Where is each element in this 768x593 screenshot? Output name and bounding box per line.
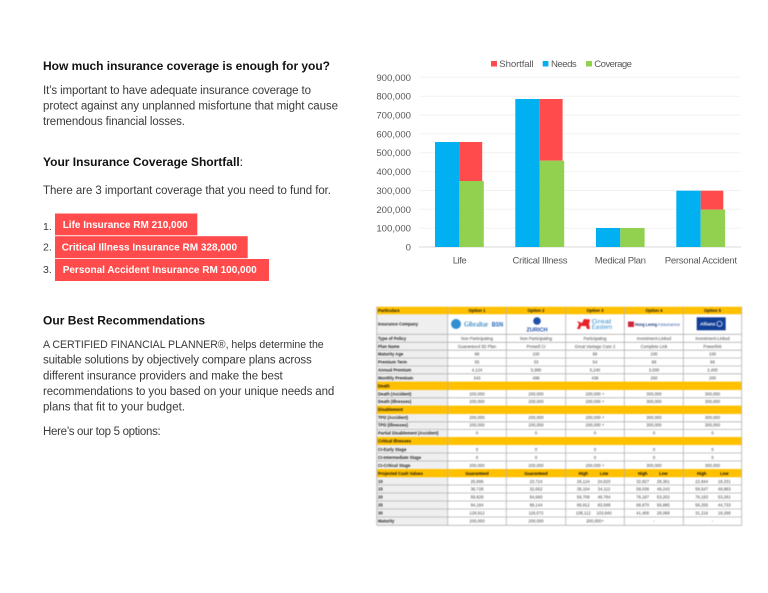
disablement section	[378, 407, 721, 436]
policy details rows: Investment-Linked	[695, 336, 730, 341]
y axis labels: 100,000	[376, 224, 411, 235]
disablement section: 200,000 +	[586, 415, 605, 420]
disablement section: Disablement	[378, 407, 404, 412]
bars: life	[435, 142, 484, 247]
heading: recommendations: Our Best Recommendations	[43, 314, 205, 328]
disablement section: 200,000	[528, 422, 544, 428]
x axis labels: Personal Accident	[665, 256, 737, 266]
disablement section: 200,000 +	[586, 422, 605, 428]
disablement section: 300,000	[646, 415, 662, 420]
projected cash values section: 59,036	[636, 486, 650, 492]
death section: 200,000	[469, 392, 485, 396]
logo: Gibraltar BSN: BSN	[492, 322, 503, 328]
y axis labels: 700,000	[376, 110, 411, 122]
y axis labels: 500,000	[376, 148, 411, 159]
policy details rows: 5,980	[531, 368, 542, 372]
projected cash values section: 94,184	[471, 502, 484, 508]
projected cash values section: Maturity	[378, 518, 395, 524]
projected cash values section: 68,670	[636, 502, 650, 508]
policy details rows: 5,240	[590, 368, 601, 372]
projected cash values section: 22,844	[695, 479, 709, 484]
table header row: Particulars	[378, 308, 400, 313]
list: shortfall items	[43, 214, 269, 281]
text block: top 5 options: Here’s our top 5 options:	[43, 426, 161, 438]
policy details rows: Complete Link	[641, 344, 668, 349]
critical illnesses section: CI-Critical Stage	[378, 463, 411, 468]
projected cash values section: 54,660	[530, 494, 543, 500]
logo: Gibraltar BSN	[451, 319, 503, 329]
logo: Great Eastern: Great	[592, 318, 611, 326]
projected cash values section: 86,812	[577, 502, 590, 508]
disablement section: 200,000	[469, 422, 485, 428]
item: life insurance: Life Insurance RM 210,000	[63, 220, 188, 231]
logo: Hong Leong Assurance: Assurance	[658, 322, 680, 327]
y axis labels: 900,000	[376, 73, 411, 84]
logo: Zurich	[526, 317, 548, 334]
projected cash values section: 28,068	[657, 510, 670, 516]
insurance company row with logos: Insurance Company	[378, 322, 419, 327]
critical illnesses section: 200,000	[469, 463, 485, 468]
projected cash values section: 200,000+	[586, 518, 604, 524]
logo: Great Eastern	[577, 318, 613, 331]
critical illnesses section: 0	[594, 455, 597, 460]
table header row: Option 3	[587, 308, 604, 313]
death section: Death	[378, 384, 390, 388]
policy details rows: Monthly Premium	[378, 376, 413, 380]
text block: recommendations paragraph: different insurance providers and make the best	[43, 370, 283, 382]
projected cash values section: 83,588	[598, 502, 611, 508]
logo: Allianz	[697, 317, 726, 330]
projected cash values section: 200,000	[469, 518, 485, 524]
policy details rows: 100	[532, 352, 540, 356]
policy details rows: Prowell CI	[526, 344, 546, 349]
y axis labels: 400,000	[376, 167, 411, 178]
logo: Great Eastern: Eastern	[592, 324, 613, 331]
y axis labels: 800,000	[376, 92, 411, 103]
policy details rows: 55	[475, 360, 480, 364]
bars: medical plan	[596, 228, 645, 247]
policy details rows: 86	[593, 352, 598, 356]
text block: three coverages: There are 3 important coverage that you need to fund for.	[43, 185, 331, 197]
heading: how much coverage: How much insurance coverage is enough for you?	[43, 59, 330, 73]
projected cash values section: Projected Cash Values	[378, 471, 424, 476]
bars: personal accident	[676, 191, 725, 247]
disablement section: 300,000	[705, 422, 721, 428]
projected cash values section: 56,885	[657, 502, 670, 508]
bars: critical illness	[515, 99, 564, 247]
critical illnesses section: 0	[711, 447, 714, 452]
chart legend	[491, 59, 632, 70]
disablement section: 0	[535, 430, 538, 436]
critical illnesses section: 0	[476, 447, 479, 452]
critical illnesses section: 0	[535, 455, 538, 460]
death section: 200,000 +	[586, 392, 605, 396]
projected cash values section: 10	[378, 479, 383, 484]
projected cash values section: 49,883	[718, 486, 731, 492]
x axis labels: Life	[453, 256, 467, 266]
logo: Gibraltar BSN: Gibraltar	[464, 320, 488, 328]
policy details rows: 100	[709, 352, 717, 356]
comparison table: top 5 options	[377, 307, 742, 525]
projected cash values section: 76,187	[636, 494, 650, 500]
policy details rows: Plan Name	[378, 344, 400, 349]
projected cash values section: 23,724	[530, 479, 543, 484]
disablement section: 0	[653, 430, 656, 436]
text block: recommendations paragraph: plans that fit to your budget.	[43, 402, 185, 414]
projected cash values section	[378, 471, 731, 524]
policy details rows: 4,124	[472, 368, 483, 372]
projected cash values section: 108,112	[576, 510, 591, 516]
critical illnesses section: CI-Intermediate Stage	[378, 455, 422, 460]
projected cash values section: Low	[600, 471, 609, 476]
chart legend: Needs	[551, 59, 577, 70]
projected cash values section: 32,652	[530, 486, 543, 492]
policy details rows: Great Vantage Care 2	[575, 344, 616, 349]
y axis labels: 300,000	[376, 186, 411, 197]
policy details rows: Annual Premium	[378, 368, 412, 372]
item: personal accident insurance	[43, 259, 269, 281]
death section: Death (Illnesses)	[378, 399, 412, 404]
text block: recommendations paragraph: suitable solutions by objectively compare plans across	[43, 354, 312, 366]
policy details rows: 200	[709, 376, 717, 380]
policy details rows: Premium Term	[378, 360, 407, 364]
disablement section: 0	[711, 430, 714, 436]
disablement section: 200,000	[469, 415, 485, 420]
disablement section: 300,000	[705, 415, 721, 420]
projected cash values section: 118,072	[529, 510, 544, 516]
x axis labels	[453, 256, 737, 266]
policy details rows: Guaranteed 3D Plan	[458, 344, 497, 349]
policy details rows: 250	[650, 376, 658, 380]
death section: 200,000	[469, 399, 485, 404]
projected cash values section: 49,243	[657, 486, 670, 492]
policy details rows: Non Participating	[461, 336, 494, 341]
death section: 300,000	[705, 392, 721, 396]
critical illnesses section: 0	[653, 447, 656, 452]
projected cash values section: 31,216	[695, 510, 709, 516]
policy details rows: 54	[593, 360, 598, 364]
death section: 300,000	[646, 399, 662, 404]
item: life insurance: 1.	[43, 221, 52, 233]
projected cash values section: 30	[378, 510, 383, 516]
x axis labels: Medical Plan	[595, 256, 646, 266]
item: life insurance	[43, 214, 197, 235]
critical illnesses section	[378, 438, 721, 468]
policy details rows: 100	[650, 352, 658, 356]
text block: recommendations paragraph	[43, 339, 334, 414]
projected cash values section: 26,124	[577, 479, 590, 484]
policy details rows: 88	[475, 352, 480, 356]
policy details rows: 498	[532, 376, 540, 380]
text block: intro paragraph: tremendous financial losses.	[43, 116, 185, 128]
death section	[378, 384, 721, 404]
policy details rows: Maturity Age	[378, 352, 404, 356]
projected cash values section: 103,640	[596, 510, 612, 516]
death section: Death (Accident)	[378, 392, 412, 396]
death section: 300,000	[705, 399, 721, 404]
policy details rows: 68	[710, 360, 715, 364]
projected cash values section: -	[712, 518, 714, 524]
critical illnesses section: CI-Early Stage	[378, 447, 407, 452]
projected cash values section: 59,828	[471, 494, 484, 500]
table header row: Option 1	[469, 308, 486, 313]
policy details rows: 2,400	[707, 368, 718, 372]
projected cash values section: 49,784	[598, 494, 611, 500]
y axis labels: 0	[406, 242, 411, 254]
projected cash values section: -	[653, 518, 655, 524]
text block: intro paragraph: protect against any unplanned misfortune that might cause	[43, 100, 338, 112]
policy details rows	[378, 336, 730, 380]
disablement section: TPD (Accident)	[378, 415, 409, 420]
projected cash values section: 44,733	[718, 502, 731, 508]
projected cash values section: 18,331	[718, 479, 731, 484]
policy details rows: Non Participating	[520, 336, 553, 341]
projected cash values section: Guaranteed	[524, 471, 548, 476]
projected cash values section: High	[579, 471, 588, 476]
text block: intro paragraph: It’s important to have adequate insurance coverage to	[43, 85, 311, 97]
disablement section: TPD (Illnesses)	[378, 422, 409, 428]
projected cash values section: 56,255	[695, 502, 709, 508]
logo: Allianz: Allianz	[700, 322, 716, 328]
projected cash values section: 41,406	[636, 510, 650, 516]
policy details rows: 436	[592, 376, 599, 380]
logo: Zurich: ZURICH	[526, 328, 548, 334]
heading: coverage shortfall: Your Insurance Coverage Shortfall:	[43, 155, 243, 169]
critical illnesses section: 0	[653, 455, 656, 460]
item: critical illness insurance: 2.	[43, 242, 52, 254]
table header row	[378, 308, 722, 313]
table header row: Option 5	[704, 308, 722, 313]
critical illnesses section: 0	[594, 447, 597, 452]
projected cash values section: 36,104	[577, 486, 590, 492]
table header row: Option 2	[528, 308, 545, 313]
table header row: Option 4	[646, 308, 663, 313]
projected cash values section: 53,261	[718, 494, 731, 500]
policy details rows: 68	[652, 360, 657, 364]
death section: 300,000	[646, 392, 662, 396]
projected cash values section: High	[697, 471, 707, 476]
y axis labels: 600,000	[376, 129, 411, 140]
chart legend: Shortfall	[499, 59, 534, 70]
projected cash values section: Guaranteed	[465, 471, 489, 476]
critical illnesses section: 0	[476, 455, 479, 460]
disablement section: 0	[594, 430, 597, 436]
projected cash values section: 28,361	[657, 479, 670, 484]
projected cash values section: 20	[378, 494, 383, 500]
chart legend: Coverage	[594, 59, 632, 70]
disablement section: Partial Disablement (Accident)	[378, 430, 439, 436]
projected cash values section: 18,268	[718, 510, 731, 516]
policy details rows: 3,000	[649, 368, 660, 372]
death section: 200,000 +	[586, 399, 605, 404]
projected cash values section: 36,728	[471, 486, 484, 492]
projected cash values section: 25	[378, 502, 383, 508]
disablement section: 0	[476, 430, 479, 436]
death section: 200,000	[528, 392, 544, 396]
projected cash values section: 15	[378, 486, 383, 492]
projected cash values section: 24,820	[598, 479, 611, 484]
critical illnesses section: 0	[535, 447, 538, 452]
text block: recommendations paragraph: recommendations to you based on your unique needs and	[43, 386, 334, 398]
item: critical illness insurance: Critical Illness Insurance RM 328,000	[62, 242, 237, 253]
policy details rows: 33	[534, 360, 539, 364]
projected cash values section: 76,183	[695, 494, 709, 500]
policy details rows: 343	[474, 376, 481, 380]
projected cash values section: 34,112	[598, 486, 611, 492]
logo: Hong Leong Assurance: Hong Leong	[635, 322, 657, 327]
policy details rows: Powerlink	[703, 344, 722, 349]
item: personal accident insurance: Personal Accident Insurance RM 100,000	[63, 265, 257, 276]
logo: Hong Leong Assurance	[628, 322, 680, 327]
projected cash values section: Low	[720, 471, 729, 476]
y axis labels	[376, 73, 411, 254]
critical illnesses section: 300,000	[646, 463, 662, 468]
projected cash values section: 32,827	[636, 479, 650, 484]
critical illnesses section: 0	[711, 455, 714, 460]
critical illnesses section: 300,000	[705, 463, 721, 468]
death section: 200,000	[528, 399, 544, 404]
critical illnesses section: 200,000 +	[586, 463, 605, 468]
item: critical illness insurance	[43, 236, 248, 258]
insurance company row with logos	[378, 317, 726, 334]
policy details rows: Investment-Linked	[637, 336, 672, 341]
disablement section: 300,000	[646, 422, 662, 428]
critical illnesses section: 200,000	[528, 463, 544, 468]
critical illnesses section: Critical Illnesses	[378, 438, 412, 444]
y axis labels: 200,000	[376, 205, 411, 216]
text block: intro paragraph	[43, 85, 338, 128]
projected cash values section: 89,144	[530, 502, 543, 508]
policy details rows: Participating	[583, 336, 607, 341]
projected cash values section: Low	[659, 471, 668, 476]
x axis labels: Critical Illness	[512, 256, 568, 266]
projected cash values section: High	[638, 471, 648, 476]
text block: recommendations paragraph: A CERTIFIED FINANCIAL PLANNER®, helps determine the	[43, 339, 324, 351]
projected cash values section: 128,912	[469, 510, 485, 516]
projected cash values section: 53,202	[657, 494, 670, 500]
policy details rows: Type of Policy	[378, 336, 407, 341]
projected cash values section: 56,708	[577, 494, 590, 500]
item: personal accident insurance: 3.	[43, 264, 52, 276]
disablement section: 200,000	[528, 415, 544, 420]
projected cash values section: 200,000	[528, 518, 544, 524]
projected cash values section: 25,896	[471, 479, 484, 484]
projected cash values section: 59,547	[695, 486, 709, 492]
bar chart: coverage	[376, 59, 741, 266]
